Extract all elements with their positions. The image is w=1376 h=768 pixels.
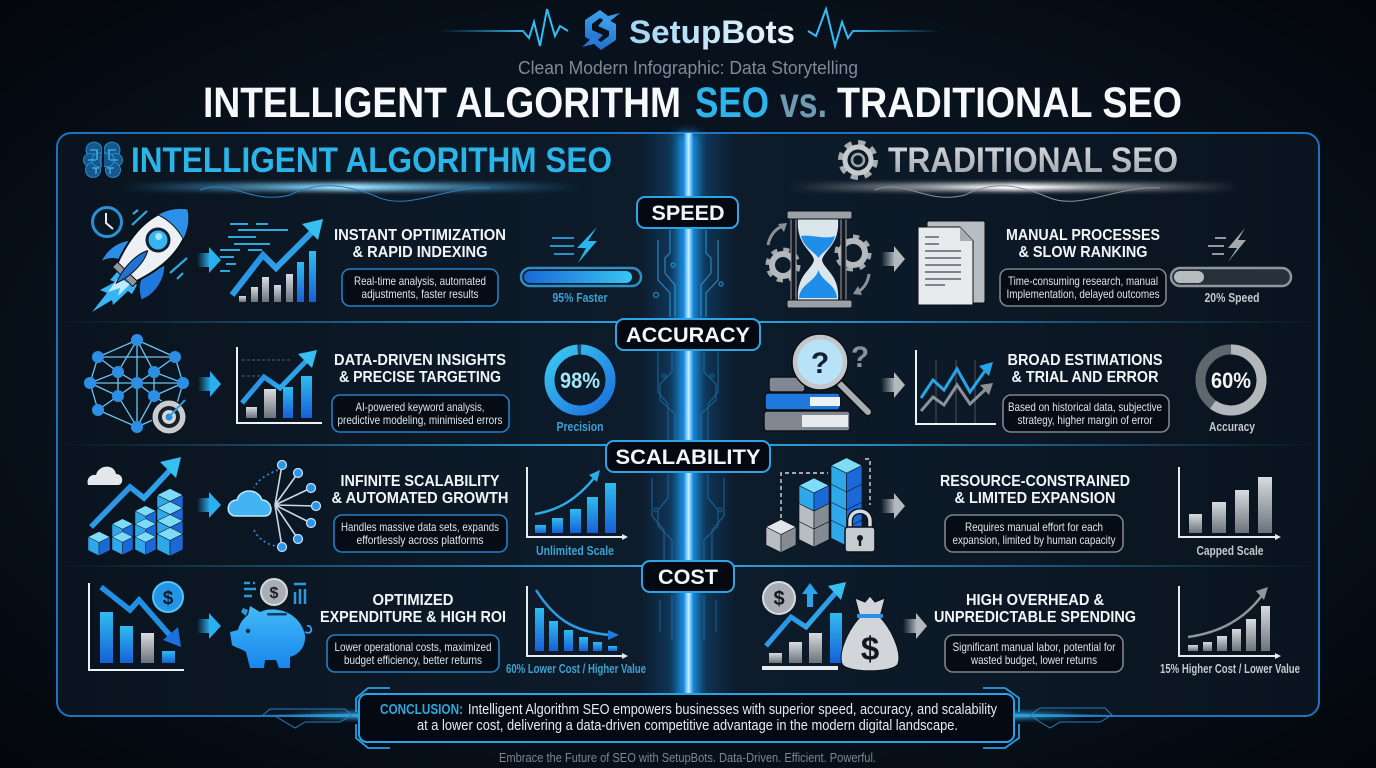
row: accuracy, intelligent <box>84 334 612 434</box>
chart: targeted growth <box>237 347 322 423</box>
description box: predictive modeling, minimised errors <box>338 413 502 427</box>
metric label: 60% Lower Cost / Higher Value <box>506 662 646 676</box>
progress bar: 20 percent <box>1171 268 1291 286</box>
category label: cost <box>642 561 734 592</box>
heading: & TRIAL AND ERROR <box>1012 369 1159 386</box>
decorative connectors <box>255 708 1118 728</box>
heading: & AUTOMATED GROWTH <box>332 490 508 507</box>
flare under heading <box>790 183 1240 201</box>
icon: hourglass with gears <box>768 211 869 308</box>
icon: right pulse line <box>808 9 940 46</box>
metric label: Accuracy <box>1209 420 1255 434</box>
heading <box>334 352 506 386</box>
row: scalability, intelligent <box>88 457 628 558</box>
icon: rising cost with money bag: $ <box>773 588 785 610</box>
heading: UNPREDICTABLE SPENDING <box>934 609 1136 626</box>
description box <box>945 635 1123 672</box>
heading: EXPENDITURE & HIGH ROI <box>320 609 506 626</box>
description box: AI-powered keyword analysis, <box>356 400 484 414</box>
description box <box>342 269 498 306</box>
icon: falling cost chart <box>89 582 184 670</box>
icon: clock <box>92 208 122 236</box>
icon: rocket <box>92 194 203 312</box>
icon: documents <box>918 221 985 305</box>
heading: & SLOW RANKING <box>1018 244 1148 261</box>
heading: & LIMITED EXPANSION <box>954 490 1116 507</box>
description box <box>945 515 1123 552</box>
title <box>203 79 1182 127</box>
icon: lightning <box>550 227 597 263</box>
category label: speed: SPEED <box>652 202 724 225</box>
description box: Based on historical data, subjective <box>1008 400 1162 414</box>
description box <box>327 635 499 672</box>
chart: lower cost <box>527 586 628 659</box>
description box: Real-time analysis, automated <box>354 274 486 288</box>
heading: RESOURCE-CONSTRAINED <box>940 473 1130 490</box>
donut: 98 percent <box>548 348 612 412</box>
arrow <box>197 613 221 639</box>
heading <box>940 473 1130 507</box>
conclusion text line 1: CONCLUSION: <box>380 702 463 718</box>
chart: unlimited scale <box>527 467 628 540</box>
heading: INSTANT OPTIMIZATION <box>334 227 506 244</box>
description box: strategy, higher margin of error <box>1018 413 1152 427</box>
icon: cubes with rising arrow and cloud <box>88 457 183 556</box>
arrow <box>881 372 905 398</box>
title part: traditional SEO: TRADITIONAL SEO <box>837 79 1182 127</box>
icon: piggy bank <box>230 579 311 668</box>
arrow <box>903 613 927 639</box>
row: accuracy, traditional <box>764 334 1262 434</box>
heading: & PRECISE TARGETING <box>339 369 501 386</box>
heading text: TRADITIONAL SEO <box>888 141 1178 180</box>
conclusion text line 1: Intelligent Algorithm SEO empowers businesses with superior speed, accuracy, and scalability <box>468 702 998 718</box>
heading: BROAD ESTIMATIONS <box>1008 352 1163 369</box>
icon: gear <box>841 143 875 177</box>
central beam <box>640 133 736 703</box>
heading <box>934 592 1136 626</box>
description box: Handles massive data sets, expands <box>341 520 499 534</box>
metric label: Unlimited Scale <box>536 544 614 558</box>
donut: 60 percent <box>1200 350 1262 410</box>
metric label: Capped Scale <box>1196 544 1264 558</box>
icon: left pulse line <box>440 9 568 46</box>
chart: rising performance <box>220 219 323 302</box>
category label: accuracy: ACCURACY <box>626 324 750 347</box>
description box: wasted budget, lower returns <box>970 653 1097 667</box>
conclusion text line 2: at a lower cost, delivering a data-driven competitive advantage in the modern digital landscape. <box>417 718 958 734</box>
icon: piggy bank: $ <box>270 585 279 602</box>
panel heading: traditional seo <box>790 141 1240 201</box>
description box: Time-consuming research, manual <box>1008 274 1158 288</box>
heading <box>1006 227 1160 261</box>
title part: SEO: SEO <box>695 79 769 127</box>
footer tagline: Embrace the Future of SEO with SetupBots. Data-Driven. Efficient. Powerful. <box>499 751 876 765</box>
description box: Lower operational costs, maximized <box>334 640 492 654</box>
description box: budget efficiency, better returns <box>344 653 482 667</box>
heading <box>332 473 508 507</box>
heading: OPTIMIZED <box>372 592 454 609</box>
icon: cloud network <box>228 460 320 552</box>
chart: estimation lines <box>916 350 996 424</box>
arrow <box>881 246 905 272</box>
heading: DATA-DRIVEN INSIGHTS <box>334 352 506 369</box>
category label: scalability <box>606 441 770 472</box>
icon: brain <box>84 142 122 178</box>
icon: neural network with target <box>84 334 189 434</box>
row: scalability, traditional <box>766 458 1281 558</box>
category label: speed <box>637 197 738 228</box>
description box: Significant manual labor, potential for <box>952 640 1116 654</box>
title part: vs.: vs. <box>780 79 827 127</box>
description box <box>1003 395 1169 432</box>
header: logo and pulses <box>440 9 940 50</box>
icon: SetupBots logo <box>582 10 620 50</box>
row separators <box>62 321 1314 567</box>
description box: Requires manual effort for each <box>965 520 1103 534</box>
description box <box>1000 269 1166 306</box>
icon: falling cost chart: $ <box>163 588 174 609</box>
logo wordmark: SetupBots <box>629 14 795 50</box>
icon: lightning <box>1208 228 1246 262</box>
metric label: Precision <box>556 420 604 434</box>
heading: INFINITE SCALABILITY <box>340 473 500 490</box>
arrow <box>197 247 221 273</box>
metric label: 20% Speed <box>1204 291 1260 305</box>
arrow <box>197 492 221 518</box>
heading: HIGH OVERHEAD & <box>966 592 1104 609</box>
title part: intelligent algorithm: INTELLIGENT ALGORITHM <box>203 79 681 127</box>
heading <box>334 227 506 261</box>
heading <box>1008 352 1163 386</box>
box <box>359 694 1014 742</box>
row: speed, traditional <box>768 211 1291 308</box>
heading text: INTELLIGENT ALGORITHM SEO <box>131 141 612 180</box>
heading: & RAPID INDEXING <box>352 244 488 261</box>
row: cost, intelligent <box>89 579 646 676</box>
conclusion callout <box>255 688 1118 748</box>
icon: books and magnifier <box>764 334 869 431</box>
arrow <box>881 493 905 519</box>
description box: effortlessly across platforms <box>356 533 484 547</box>
row: speed, intelligent <box>92 194 641 312</box>
category label: scalability: SCALABILITY <box>616 446 760 469</box>
description box: adjustments, faster results <box>362 287 478 301</box>
description box <box>332 395 509 432</box>
main comparison panel <box>57 133 1319 716</box>
subtitle: Clean Modern Infographic: Data Storytelling <box>518 58 858 78</box>
icon: rising cost with money bag: $ <box>861 630 879 667</box>
metric label: 15% Higher Cost / Lower Value <box>1160 662 1300 676</box>
category label: accuracy <box>616 319 760 350</box>
icon: locked blocks <box>766 458 875 552</box>
description box: expansion, limited by human capacity <box>952 533 1116 547</box>
heading: MANUAL PROCESSES <box>1006 227 1160 244</box>
flare under heading <box>120 183 580 201</box>
arrow <box>198 371 221 397</box>
chart: capped scale <box>1179 467 1281 540</box>
row: cost, traditional <box>762 582 1300 676</box>
donut: 60 percent: 60% <box>1211 368 1251 393</box>
icon: books and magnifier: ? <box>851 341 869 374</box>
icon: books and magnifier: ? <box>811 347 829 380</box>
panel heading: intelligent algorithm seo <box>84 141 612 201</box>
category label: cost: COST <box>658 566 718 589</box>
progress bar: 95 percent <box>521 268 641 286</box>
description box <box>334 515 507 552</box>
brackets <box>356 688 1019 748</box>
description box: Implementation, delayed outcomes <box>1006 287 1160 301</box>
chart: higher cost <box>1179 586 1281 659</box>
icon: rising cost with money bag <box>762 582 899 671</box>
metric label: 95% Faster <box>552 291 608 305</box>
donut: 98 percent: 98% <box>560 368 600 393</box>
heading <box>320 592 506 626</box>
